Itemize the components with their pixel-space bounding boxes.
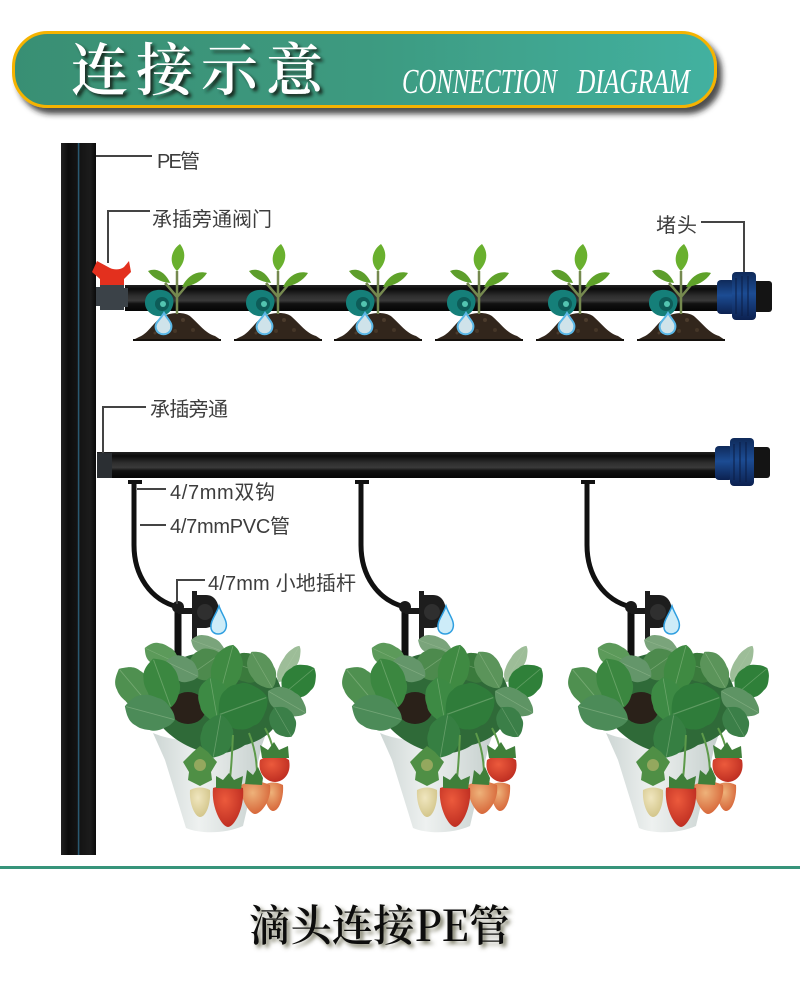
label: bypass valve: 承插旁通阀门 (152, 208, 272, 231)
footer caption: 滴头连接PE管 (249, 893, 510, 954)
hanging planter 1 (106, 480, 324, 832)
hanging planter 2 (333, 480, 551, 832)
footer divider (0, 866, 800, 869)
label: ground stake (177, 572, 356, 604)
label: bypass: 承插旁通 (150, 398, 228, 421)
banner subtitle: DIAGRAM (576, 62, 691, 101)
banner background (14, 32, 716, 106)
end plug, top pipe (717, 272, 772, 320)
banner (14, 25, 716, 107)
red handle (92, 261, 131, 285)
end plug, lower pipe (715, 438, 770, 486)
seedling 2 (234, 244, 322, 341)
label: PE pipe (96, 150, 200, 173)
bypass valve (92, 261, 131, 310)
seedlings row (133, 244, 725, 341)
label: PVC tube: 4/7mmPVC管 (170, 515, 290, 538)
banner title: 连接示意 (71, 25, 331, 107)
label: end plug: 堵头 (656, 214, 697, 237)
label: bypass (103, 398, 228, 453)
label: bypass valve (108, 208, 272, 263)
hanging planter 3 (559, 480, 777, 832)
label: double hook: 4/7mm双钩 (170, 481, 275, 504)
seedling 5 (536, 244, 624, 341)
seedling 4 (435, 244, 523, 341)
banner subtitle: CONNECTION (402, 62, 558, 101)
valve body (96, 283, 128, 310)
top horizontal pipe (125, 285, 720, 311)
seedling 3 (334, 244, 422, 341)
seedling 1 (133, 244, 221, 341)
vertical PE pipe (61, 143, 96, 855)
label: PE pipe: PE管 (157, 150, 200, 173)
label: ground stake: 4/7mm 小地插杆 (208, 572, 356, 595)
lower horizontal pipe (97, 452, 720, 478)
label: end plug (656, 214, 744, 272)
seedling 6 (637, 244, 725, 341)
